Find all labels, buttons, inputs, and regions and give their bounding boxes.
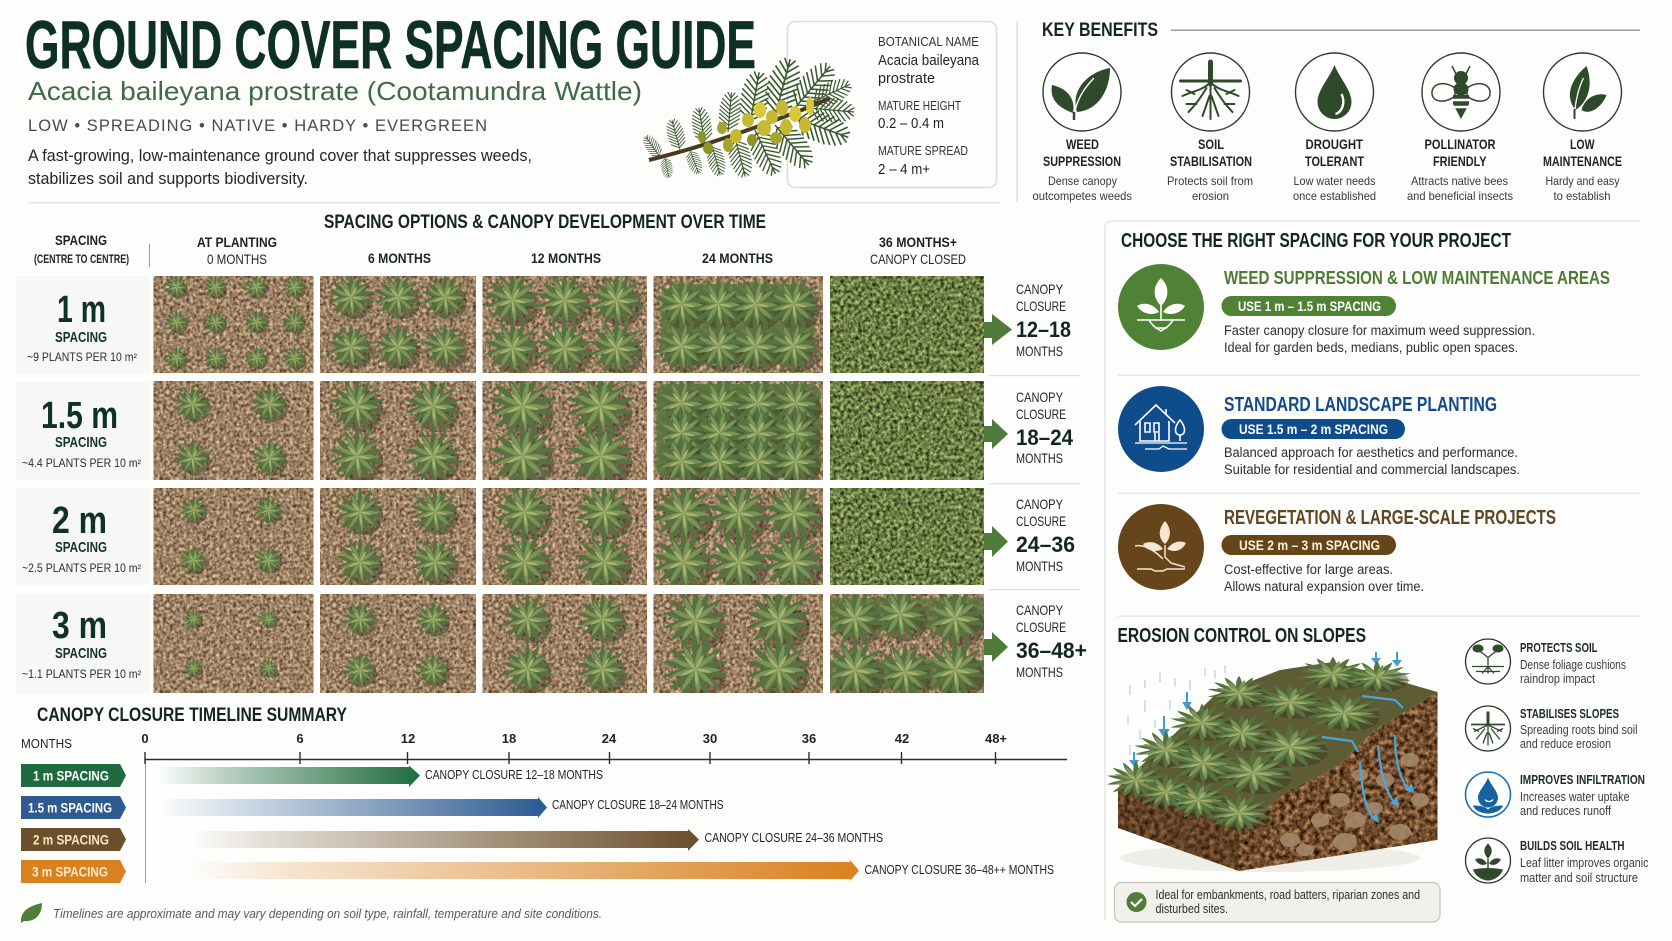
row label: 2 m: SPACING — [55, 539, 107, 556]
benefit: weed suppression — [1032, 53, 1132, 203]
timeline row: 3 m: 3 m SPACING — [32, 864, 108, 880]
photo tile: 2 m 24 months — [654, 488, 823, 585]
timeline row: 3 m: CANOPY CLOSURE 36–48++ MONTHS — [864, 863, 1054, 877]
closure label: row 2: CANOPY — [1016, 389, 1064, 405]
illustration: slope cross-section — [1106, 652, 1438, 872]
row label: 3 m: SPACING — [55, 645, 107, 662]
erosion benefit: stabilises slopes: STABILISES SLOPES — [1520, 706, 1619, 721]
column headers: SPACING — [55, 232, 107, 248]
arrow: row 3 closure — [984, 526, 1008, 557]
closure label: row 4: CANOPY — [1016, 602, 1064, 618]
photo tile: 2 m at planting — [154, 488, 314, 585]
benefit: low maintenance: MAINTENANCE — [1543, 153, 1622, 169]
timeline axis: 12 — [401, 731, 415, 746]
column headers: CANOPY CLOSED — [870, 251, 966, 267]
title: GROUND COVER SPACING GUIDE — [25, 7, 756, 83]
benefit: soil stabilisation: Protects soil from — [1167, 174, 1253, 188]
erosion benefit: protects soil: Dense foliage cushions — [1520, 658, 1626, 672]
footnote: Timelines are approximate and may vary depending on soil type, rainfall, temperature and site conditions. — [53, 906, 602, 921]
column headers: AT PLANTING — [197, 234, 277, 250]
heading: erosion control: EROSION CONTROL ON SLOPES — [1118, 625, 1366, 647]
timeline row: 1.5 m — [21, 796, 724, 819]
timeline row: 1.5 m: CANOPY CLOSURE 18–24 MONTHS — [552, 798, 724, 812]
intro text: A fast-growing, low-maintenance ground cover that suppresses weeds, — [28, 146, 532, 165]
row label: 3 m: 3 m — [52, 605, 107, 647]
column headers: 6 MONTHS — [368, 250, 431, 266]
photo tile: 3 m at planting — [154, 594, 314, 693]
timeline axis: 0 — [141, 731, 149, 746]
row label: 3 m — [16, 594, 150, 693]
callout: ideal sites: Ideal for embankments, road batters, riparian zones and — [1156, 888, 1420, 902]
timeline axis: 36 — [802, 731, 816, 746]
erosion benefit: builds soil health: BUILDS SOIL HEALTH — [1520, 838, 1624, 853]
erosion benefit: protects soil: PROTECTS SOIL — [1520, 640, 1598, 655]
closure label: row 1 — [1016, 281, 1071, 359]
option: revegetation: REVEGETATION & LARGE-SCALE PROJECTS — [1224, 507, 1556, 529]
timeline axis: MONTHS — [21, 736, 72, 751]
column headers: (CENTRE TO CENTRE) — [34, 252, 129, 266]
benefit: pollinator friendly — [1407, 53, 1513, 203]
intro text — [28, 146, 532, 188]
row label: 3 m: ~1.1 PLANTS PER 10 m² — [22, 669, 141, 681]
closure label: row 1: 12–18 — [1016, 317, 1071, 342]
photo tile: 1 m 24 months — [654, 276, 823, 373]
timeline row: 2 m: 2 m SPACING — [33, 832, 109, 848]
option: standard landscape — [1118, 386, 1520, 477]
erosion benefit: improves infiltration — [1466, 772, 1645, 818]
closure label: row 3: CANOPY — [1016, 496, 1064, 512]
benefit: soil stabilisation — [1167, 53, 1253, 203]
panel: plant facts — [788, 22, 996, 188]
arrow: row 4 closure — [984, 632, 1008, 662]
row label: 1 m: 1 m — [57, 289, 106, 331]
photo tile: 2 m 12 months — [482, 488, 647, 585]
benefit: drought tolerant — [1293, 53, 1376, 203]
erosion benefit: protects soil — [1466, 639, 1626, 686]
callout: ideal sites — [1114, 882, 1440, 922]
heading: key benefits: KEY BENEFITS — [1042, 20, 1158, 41]
photo tile: 1.5 m 24 months — [654, 381, 823, 480]
timeline row: 2 m: CANOPY CLOSURE 24–36 MONTHS — [704, 831, 883, 845]
timeline axis: 42 — [895, 731, 909, 746]
benefit: soil stabilisation: STABILISATION — [1170, 153, 1252, 169]
timeline row: 3 m — [21, 860, 1054, 883]
panel: plant facts: BOTANICAL NAME — [878, 35, 979, 49]
option: revegetation: Allows natural expansion over time. — [1224, 579, 1424, 594]
photo tile: 1.5 m at planting — [154, 381, 314, 480]
closure label: row 3 — [1016, 496, 1075, 574]
erosion benefit: improves infiltration: Increases water uptake — [1520, 790, 1630, 804]
photo tile: 3 m 36 months — [830, 594, 984, 693]
benefit: low maintenance: LOW — [1570, 136, 1595, 152]
column headers: 36 MONTHS+ — [879, 234, 957, 250]
row label: 1.5 m: 1.5 m — [41, 395, 118, 437]
row label: 1 m: ~9 PLANTS PER 10 m² — [27, 352, 137, 364]
timeline axis: 24 — [602, 731, 617, 746]
option: weed suppression: Ideal for garden beds, medians, public open spaces. — [1224, 340, 1518, 355]
closure label: row 2 — [1016, 389, 1074, 466]
intro text: stabilizes soil and supports biodiversity. — [28, 169, 308, 188]
option: standard landscape: Suitable for residential and commercial landscapes. — [1224, 462, 1520, 477]
photo tile: 3 m 24 months — [654, 594, 823, 693]
option: standard landscape: USE 1.5 m – 2 m SPACING — [1239, 421, 1388, 437]
column headers: 12 MONTHS — [531, 250, 601, 266]
photo tile: 1 m 12 months — [482, 276, 647, 373]
erosion benefit: builds soil health: matter and soil structure — [1520, 871, 1638, 885]
closure label: row 1: CANOPY — [1016, 281, 1064, 297]
photo tile: 2 m 6 months — [320, 488, 476, 585]
benefit: low maintenance — [1543, 53, 1622, 203]
arrow: row 1 closure — [984, 314, 1012, 345]
erosion benefit: protects soil: raindrop impact — [1520, 672, 1595, 686]
row label: 1.5 m — [16, 381, 150, 480]
closure label: row 2: 18–24 — [1016, 425, 1074, 450]
subtitle: Acacia baileyana prostrate (Cootamundra Wattle) — [28, 76, 642, 106]
erosion benefit: stabilises slopes: Spreading roots bind soil — [1520, 723, 1638, 737]
option: revegetation: USE 2 m – 3 m SPACING — [1239, 537, 1380, 553]
row label: 2 m — [16, 488, 150, 585]
panel: plant facts: prostrate — [878, 71, 935, 87]
benefit: pollinator friendly: Attracts native bees — [1411, 174, 1508, 188]
photo tile: 1 m canopy closed — [830, 276, 984, 373]
benefit: low maintenance: to establish — [1554, 189, 1610, 203]
timeline axis: 30 — [703, 731, 717, 746]
closure label: row 2: CLOSURE — [1016, 406, 1066, 422]
erosion benefit: builds soil health — [1466, 838, 1648, 885]
benefit: soil stabilisation: SOIL — [1198, 136, 1224, 152]
row label: 1.5 m: SPACING — [55, 434, 107, 451]
photo tile: 1 m at planting — [154, 276, 314, 373]
timeline row: 1 m — [21, 764, 603, 787]
arrow: row 2 closure — [984, 419, 1008, 449]
icon: wattle sprig — [640, 55, 855, 179]
benefit: drought tolerant: TOLERANT — [1305, 153, 1364, 169]
option: weed suppression: USE 1 m – 1.5 m SPACING — [1238, 298, 1381, 314]
panel: plant facts: 0.2 – 0.4 m — [878, 116, 944, 132]
benefit: weed suppression: SUPPRESSION — [1043, 153, 1121, 169]
timeline row: 1 m: 1 m SPACING — [33, 768, 109, 784]
benefit: weed suppression: outcompetes weeds — [1032, 189, 1132, 203]
option: revegetation: Cost-effective for large areas. — [1224, 562, 1393, 577]
plant attributes: LOW • SPREADING • NATIVE • HARDY • EVERGREEN — [28, 117, 487, 135]
benefit: pollinator friendly: POLLINATOR — [1424, 136, 1496, 152]
photo tile: 1.5 m 12 months — [482, 381, 647, 480]
benefit: weed suppression: Dense canopy — [1048, 174, 1117, 188]
panel: plant facts: MATURE HEIGHT — [878, 99, 961, 113]
row label: 2 m: 2 m — [52, 500, 107, 542]
benefit: pollinator friendly: and beneficial insects — [1407, 189, 1513, 203]
timeline row: 1.5 m: 1.5 m SPACING — [28, 800, 112, 816]
timeline axis: 18 — [502, 731, 516, 746]
timeline axis: 48+ — [985, 731, 1007, 746]
closure label: row 4 — [1016, 602, 1087, 680]
row label: 2 m: ~2.5 PLANTS PER 10 m² — [22, 563, 141, 575]
row label: 1 m — [16, 276, 150, 373]
closure label: row 2: MONTHS — [1016, 450, 1063, 466]
column headers: 0 MONTHS — [207, 251, 267, 267]
row label: 1.5 m: ~4.4 PLANTS PER 10 m² — [22, 458, 141, 470]
photo tile: 1 m 6 months — [320, 276, 476, 373]
callout: ideal sites: disturbed sites. — [1156, 902, 1228, 916]
photo tile: 2 m canopy closed — [830, 488, 984, 585]
option: revegetation — [1118, 504, 1556, 594]
panel: plant facts: 2 – 4 m+ — [878, 162, 930, 178]
column headers — [34, 232, 966, 267]
benefit: drought tolerant: Low water needs — [1294, 174, 1376, 188]
timeline row: 1 m: CANOPY CLOSURE 12–18 MONTHS — [425, 768, 603, 782]
closure label: row 4: CLOSURE — [1016, 619, 1066, 635]
erosion benefit: stabilises slopes: and reduce erosion — [1520, 737, 1611, 751]
option: weed suppression — [1118, 264, 1610, 355]
panel: choose spacing — [1105, 221, 1640, 920]
footnote — [21, 903, 602, 923]
option: standard landscape: Balanced approach for aesthetics and performance. — [1224, 445, 1518, 460]
benefit: low maintenance: Hardy and easy — [1546, 174, 1620, 188]
timeline axis: 6 — [296, 731, 304, 746]
photo tile: 1.5 m 6 months — [320, 381, 476, 480]
benefit: drought tolerant: once established — [1293, 189, 1376, 203]
closure label: row 4: MONTHS — [1016, 664, 1063, 680]
option: weed suppression: Faster canopy closure for maximum weed suppression. — [1224, 323, 1535, 338]
row label: 1 m: SPACING — [55, 329, 107, 346]
erosion benefit: builds soil health: Leaf litter improves organic — [1520, 856, 1648, 870]
panel: plant facts: MATURE SPREAD — [878, 144, 968, 158]
heading: choose spacing: CHOOSE THE RIGHT SPACING FOR YOUR PROJECT — [1121, 230, 1511, 252]
closure label: row 3: 24–36 — [1016, 532, 1075, 557]
benefit: soil stabilisation: erosion — [1192, 189, 1229, 203]
erosion benefit: improves infiltration: and reduces runoff — [1520, 804, 1611, 818]
closure label: row 4: 36–48+ — [1016, 638, 1087, 663]
timeline row: 2 m — [21, 828, 883, 851]
photo tile: 3 m 12 months — [482, 594, 647, 693]
timeline axis — [21, 731, 1067, 883]
option: standard landscape: STANDARD LANDSCAPE PLANTING — [1224, 394, 1497, 416]
erosion benefit: stabilises slopes — [1466, 706, 1638, 751]
photo tile: 1.5 m canopy closed — [830, 381, 984, 480]
photo tile: 3 m 6 months — [320, 594, 476, 693]
closure label: row 3: CLOSURE — [1016, 513, 1066, 529]
benefit: pollinator friendly: FRIENDLY — [1433, 153, 1487, 169]
benefit: drought tolerant: DROUGHT — [1306, 136, 1363, 152]
closure label: row 3: MONTHS — [1016, 558, 1063, 574]
heading: timeline summary: CANOPY CLOSURE TIMELINE SUMMARY — [37, 705, 347, 726]
closure label: row 1: CLOSURE — [1016, 298, 1066, 314]
panel: plant facts: Acacia baileyana — [878, 53, 980, 69]
rain — [1128, 665, 1225, 755]
closure label: row 1: MONTHS — [1016, 343, 1063, 359]
column headers: 24 MONTHS — [702, 250, 773, 266]
heading: spacing options: SPACING OPTIONS & CANOPY DEVELOPMENT OVER TIME — [324, 212, 766, 233]
benefit: weed suppression: WEED — [1066, 136, 1099, 152]
